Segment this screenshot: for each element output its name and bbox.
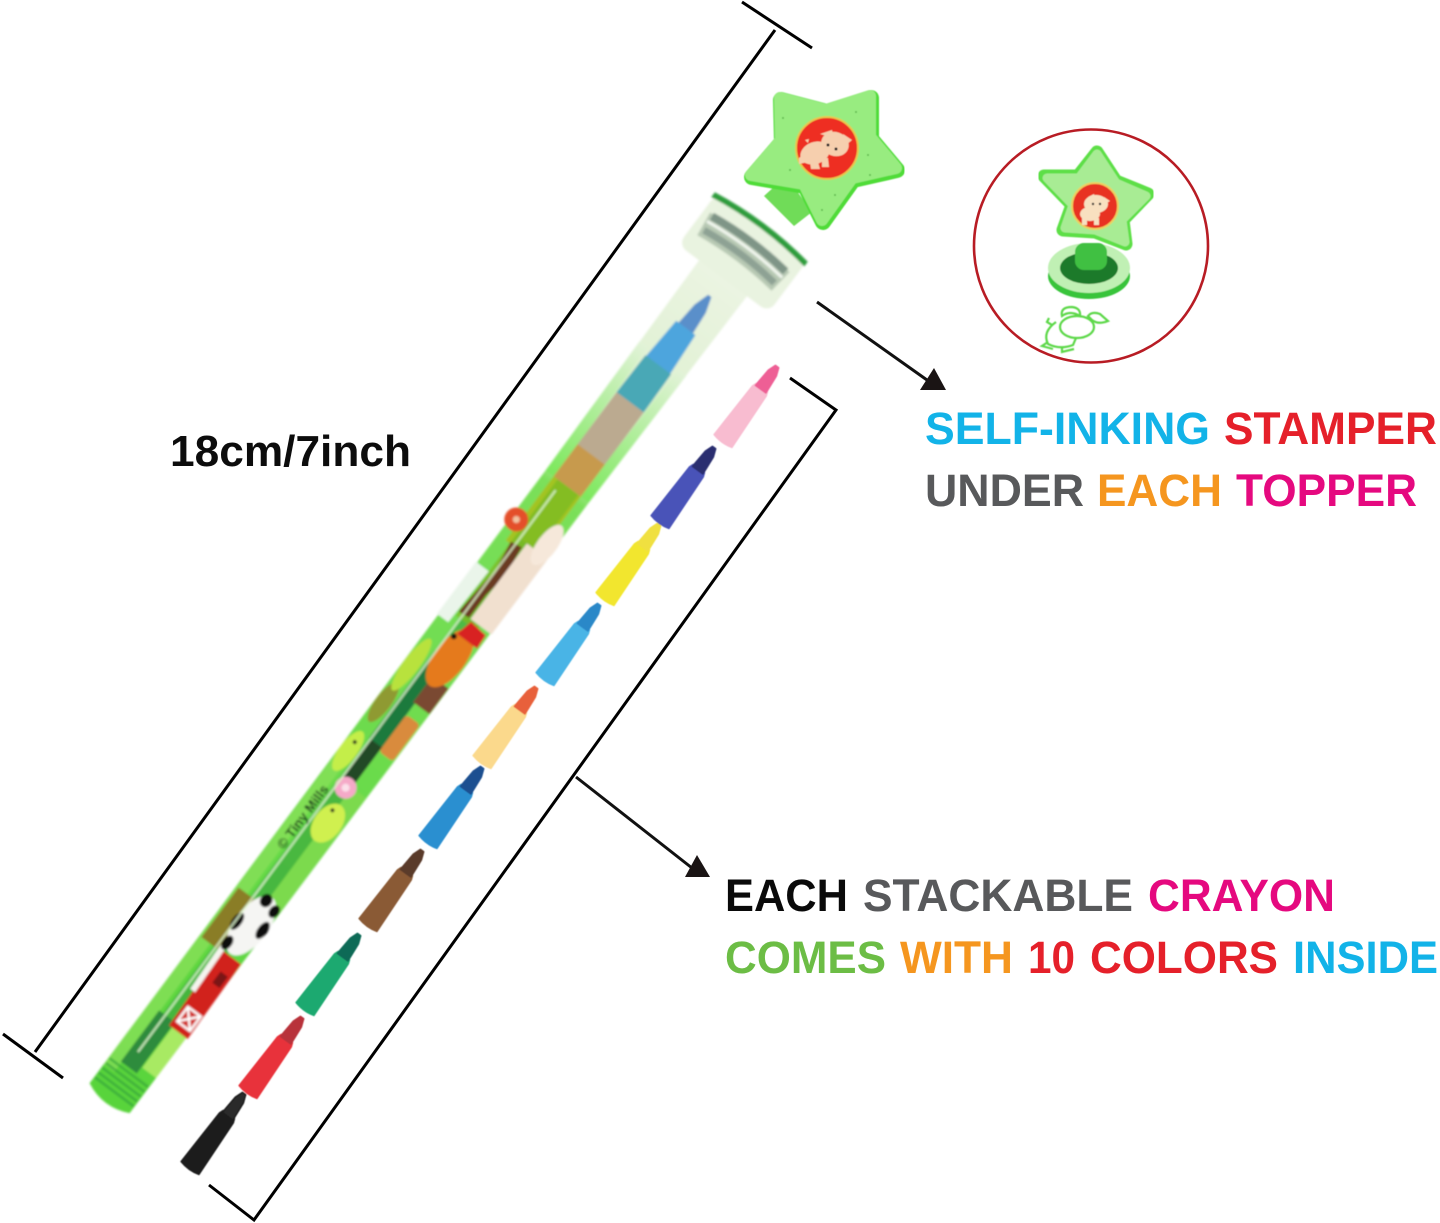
brown horse	[459, 540, 525, 621]
caption: self-inking stamper: SELF-INKING	[925, 403, 1210, 454]
pig badge art	[1080, 194, 1110, 225]
caption: self-inking stamper	[925, 403, 1437, 516]
pig badge art	[797, 128, 852, 169]
white cloud patch	[437, 562, 489, 623]
crayon stack inside the tube	[506, 286, 723, 561]
caption: stackable crayon: COMES	[725, 932, 886, 983]
star glitter	[782, 111, 871, 211]
olive panel	[201, 887, 255, 949]
dark green cap rim	[711, 189, 810, 267]
star face	[751, 96, 896, 220]
star stamper topper	[751, 96, 897, 226]
star stem	[764, 176, 812, 226]
tube with farm animal wrap	[80, 254, 750, 1121]
pale pig	[471, 516, 570, 635]
crayon stack	[180, 360, 786, 1176]
star face	[1047, 154, 1146, 242]
arrow: crayon	[576, 777, 710, 877]
caption: stackable crayon: EACH	[725, 870, 848, 921]
cap inner rings	[701, 213, 789, 285]
pink flower	[330, 772, 361, 803]
caption: stackable crayon: 10	[1028, 932, 1075, 983]
caption: stackable crayon: WITH	[900, 932, 1013, 983]
base ridges	[95, 1058, 148, 1106]
arrow: stamper	[817, 302, 946, 390]
caption: self-inking stamper: TOPPER	[1236, 465, 1417, 516]
bracket: crayon stack length	[209, 378, 836, 1220]
star edge	[1044, 152, 1148, 244]
barn	[164, 943, 246, 1039]
upper tube edges	[544, 341, 686, 504]
blue crayon segment	[418, 761, 491, 850]
green crayon segment	[295, 928, 368, 1017]
red badge	[796, 117, 858, 179]
red badge	[1072, 183, 1118, 229]
black crayon segment	[180, 1087, 253, 1176]
dark base section	[121, 1010, 175, 1074]
dark panel with bird	[325, 719, 388, 787]
stamp ink pad	[1060, 252, 1118, 284]
pink crayon segment	[713, 360, 786, 449]
sky blue crayon segment	[535, 598, 608, 687]
brand mark: © Tiny Mills	[273, 781, 332, 852]
brown patch	[413, 677, 448, 714]
cow	[214, 885, 286, 965]
caption: self-inking stamper: STAMPER	[1224, 403, 1437, 454]
green body shading	[159, 538, 532, 1028]
caption: stackable crayon: STACKABLE	[863, 870, 1133, 921]
stamp stem	[1075, 243, 1107, 270]
caption: stackable crayon: INSIDE	[1293, 932, 1438, 983]
dimension line: 18cm tube length	[3, 2, 812, 1078]
red crayon segment	[238, 1011, 311, 1100]
transparent tube cap	[677, 189, 810, 313]
caption: stackable crayon: COLORS	[1090, 932, 1278, 983]
orange flower	[499, 503, 533, 536]
leaf patches	[363, 634, 437, 726]
pale orange crayon segment	[472, 681, 545, 770]
horse patch	[379, 715, 420, 762]
cap shell	[678, 193, 807, 312]
stamp detail circle	[974, 130, 1208, 362]
dimension label: 18cm/7inch	[170, 427, 411, 476]
tube highlight	[136, 490, 557, 1052]
indigo crayon segment	[650, 441, 723, 530]
red outline	[974, 130, 1208, 362]
yellow bird	[303, 797, 352, 849]
caption: self-inking stamper: EACH	[1097, 465, 1222, 516]
pig imprint	[1042, 307, 1108, 352]
stamp base	[1048, 253, 1130, 299]
caption: stackable crayon: CRAYON	[1148, 870, 1335, 921]
caption: stackable crayon	[725, 870, 1438, 983]
brown crayon segment	[358, 844, 431, 933]
orange chicken	[417, 615, 488, 695]
caption: self-inking stamper: UNDER	[925, 465, 1084, 516]
tube body	[82, 256, 750, 1121]
dark green strip	[369, 650, 448, 747]
yellow crayon segment	[595, 518, 668, 607]
star edge	[752, 98, 897, 222]
open stamper	[1044, 152, 1148, 299]
